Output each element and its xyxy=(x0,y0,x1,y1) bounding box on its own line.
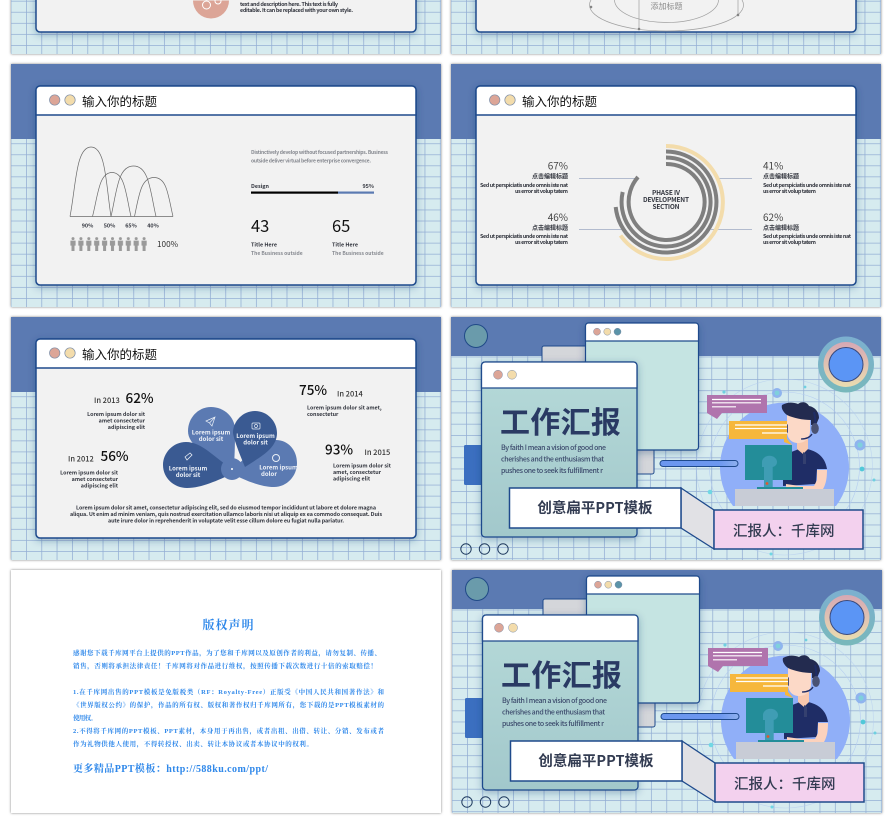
callout: 67% xyxy=(480,158,569,195)
link: 更多精品PPT模板：http://588ku.com/ppt/ xyxy=(73,762,268,775)
callout: 2013: Lorem ipsum dolor sit xyxy=(87,410,146,418)
stat: 65 xyxy=(332,213,384,257)
callout: 2015: 93% xyxy=(325,438,353,458)
callout: 46%: us error sit volup tatem xyxy=(515,238,568,246)
callout: 62%: us error sit volup tatem xyxy=(763,238,816,246)
text block: text and description here. This text is fully xyxy=(240,0,339,8)
cover subtitle: pushes one to seek its fulfillment r xyxy=(501,466,603,476)
callout: 62%: 点击编辑标题 xyxy=(763,223,799,232)
chart centre label: DEVELOPMENT xyxy=(643,194,689,204)
callout: 2013: adipiscing elit xyxy=(108,423,146,431)
callout: 2014: Lorem ipsum dolor sit amet, xyxy=(307,404,382,412)
callout: 2015: adipiscing elit xyxy=(333,474,371,482)
panel: petal diagram slide xyxy=(11,317,441,560)
callout: 2014: consectetur xyxy=(307,410,339,418)
text block xyxy=(251,149,389,164)
text block xyxy=(70,504,382,524)
callout: 2013: In 2013 xyxy=(94,395,120,406)
stat: 43: 43 xyxy=(251,213,269,237)
icon: ring xyxy=(818,336,874,392)
bar xyxy=(661,714,739,720)
callout: 67%: 67% xyxy=(548,158,568,172)
illustration: person at desk xyxy=(696,379,876,556)
heading: 输入你的标题 xyxy=(522,91,598,110)
heading: 输入你的标题 xyxy=(82,344,158,363)
text block: 《世界版权公约》的保护，作品的所有权、版权和著作权归千库网所有，您下载的是PPT模板素材的 xyxy=(73,700,384,710)
cover subtitle: By faith I mean a vision of good one xyxy=(502,696,607,706)
chart: petal diagram: dolor xyxy=(261,469,277,478)
chart centre label: PHASE IV xyxy=(652,187,681,197)
icon: ring xyxy=(819,590,875,646)
chart labels: 65% xyxy=(125,222,137,230)
front window xyxy=(482,615,638,790)
callout: 62%: Sed ut perspiciatis unde omnis iste nat xyxy=(763,232,852,240)
panel: arches chart slide xyxy=(11,64,441,307)
callout: 62%: 62% xyxy=(763,209,783,224)
callout: 67%: Sed ut perspiciatis unde omnis iste nat xyxy=(480,181,569,189)
icon: circle xyxy=(466,578,488,600)
callout: 2012: 56% xyxy=(100,445,129,465)
callout: 2012 xyxy=(60,445,129,490)
cover subtitle: cherishes and the enthusiasm that xyxy=(502,708,605,718)
diagram: ellipses xyxy=(590,0,744,31)
blue tab xyxy=(465,698,485,738)
banner: 创意扁平PPT模板 xyxy=(537,497,653,518)
front window xyxy=(482,362,637,537)
callout: 2013: amet consectetur xyxy=(99,416,146,424)
callout: 41% xyxy=(763,158,852,195)
connector xyxy=(681,488,714,549)
decorative grey cards xyxy=(543,599,655,727)
chart labels: 40% xyxy=(147,222,159,230)
text block xyxy=(240,0,353,14)
text block: 销售，否则将承担法律责任！千库网将对作品进行维权，按照传播下载次数进行十倍的索取赔偿！ xyxy=(73,661,377,671)
back window xyxy=(586,323,698,450)
chart: petal diagram: Lorem ipsum xyxy=(169,464,207,472)
panel: cover slide xyxy=(451,317,881,560)
callout: 46% xyxy=(480,209,569,246)
chart: petal diagram: Lorem ipsum xyxy=(236,431,275,440)
callout: 2013: 62% xyxy=(126,387,154,407)
chart: petal diagram: dolor sit xyxy=(243,438,268,446)
text block: Distinctively develop without focused partnerships. Business xyxy=(251,149,389,156)
presenter box: 汇报人：千库网 xyxy=(733,520,834,541)
callout: 46%: 46% xyxy=(548,209,568,224)
chart labels: 50% xyxy=(104,222,115,230)
banner xyxy=(510,741,682,781)
text block: editable. It can be replaced with your own style. xyxy=(240,6,353,14)
icon: pagination circles xyxy=(461,544,508,554)
connector xyxy=(682,741,715,802)
callout: 41%: 41% xyxy=(763,158,783,172)
chart: petal diagram: Lorem ipsum xyxy=(259,462,298,472)
callout: 2014 xyxy=(299,379,382,418)
text block: 使用权。 xyxy=(73,713,97,722)
heading: 版权声明 xyxy=(202,617,255,632)
callout: 67%: 点击编辑标题 xyxy=(532,172,568,180)
chart: arches xyxy=(70,147,173,216)
progress bar xyxy=(251,182,374,194)
chart: radial rings xyxy=(579,146,752,259)
illustration: person at desk xyxy=(698,632,876,808)
callout: 2014: 75% xyxy=(299,379,327,399)
callout: 67%: us error sit volup tatem xyxy=(515,187,568,195)
text block: 2.不得将千库网的PPT模板、PPT素材，本身用于再出售，或者出租、出借、转让、分销、发布或者 xyxy=(73,726,384,736)
callout: 2015: amet, consectetur xyxy=(333,468,382,476)
cover title: 工作汇报 xyxy=(500,398,621,442)
stat: 65: The Business outside xyxy=(332,250,384,257)
text block: Lorem ipsum dolor sit amet, consectetur adipiscing elit, sed do eiusmod tempor incididunt ut labore et dolore magna xyxy=(76,504,376,512)
callout: 46%: 点击编辑标题 xyxy=(532,223,568,232)
callout: 2012: Lorem ipsum dolor sit xyxy=(60,468,119,476)
cover subtitle: By faith I mean a vision of good one xyxy=(501,443,606,453)
callout: 2015: In 2015 xyxy=(364,447,390,458)
icon: gears circle xyxy=(193,0,229,18)
panel: copyright slide xyxy=(11,570,441,813)
chart centre label: SECTION xyxy=(652,201,680,211)
back window xyxy=(586,576,700,703)
decorative grey cards xyxy=(542,346,654,474)
heading: 输入你的标题 xyxy=(82,91,158,110)
chart: petal diagram: dolor sit xyxy=(176,470,201,479)
blue tab xyxy=(464,445,484,485)
text block: aute irure dolor in reprehenderit in voluptate velit esse cillum dolore eu fugiat nulla pariatur. xyxy=(108,516,344,524)
callout: 41%: us error sit volup tatem xyxy=(763,187,816,195)
stat: 43: The Business outside xyxy=(251,250,303,257)
callout: 2012: amet consectetur xyxy=(72,475,119,483)
label: 添加标题 xyxy=(650,1,682,12)
icon: pagination circles xyxy=(462,797,509,807)
icon: circle xyxy=(464,324,488,348)
chart: petal diagram xyxy=(163,407,298,488)
bar xyxy=(660,460,738,466)
cover subtitle: cherishes and the enthusiasm that xyxy=(501,454,604,464)
callout: 41%: 点击编辑标题 xyxy=(763,172,799,180)
slide: top-right partial xyxy=(451,0,881,54)
text block: 1.在千库网出售的PPT模板是免版税类（RF：Royalty-Free）正版受《中国人民共和国著作法》和 xyxy=(73,687,384,696)
text block xyxy=(73,648,384,749)
label: 100%: 100% xyxy=(157,238,179,250)
slide: top-left partial xyxy=(11,0,441,54)
callout: 2012: In 2012 xyxy=(68,454,94,464)
icon row: people xyxy=(70,237,149,251)
banner: 创意扁平PPT模板 xyxy=(538,750,654,771)
banner xyxy=(510,488,681,528)
progress bar: 95% xyxy=(362,182,374,190)
text block: aliqua. Ut enim ad minim veniam, quis nostrud exercitation ullamco laboris nisi ut aliquip ex ea commodo consequat. Duis xyxy=(70,510,382,518)
stat: 65: 65 xyxy=(332,213,350,237)
chart: petal diagram: dolor sit xyxy=(199,434,224,443)
panel: cover slide repeat xyxy=(452,570,882,813)
callout: 2013 xyxy=(87,387,154,431)
presenter box xyxy=(715,763,864,802)
callout: 2015: Lorem ipsum dolor sit xyxy=(333,462,392,470)
callout: 62% xyxy=(763,209,852,246)
callout: 2014: In 2014 xyxy=(337,388,364,400)
text block: outside deliver virtual before enterprise convergence. xyxy=(251,158,371,164)
callout: 46%: Sed ut perspiciatis unde omnis iste nat xyxy=(480,232,569,240)
cover subtitle xyxy=(501,443,606,476)
text block: 感谢您下载千库网平台上提供的PPT作品，为了您和千库网以及原创作者的利益，请勿复制、传播、 xyxy=(73,648,381,658)
cover subtitle: pushes one to seek its fulfillment r xyxy=(502,719,604,729)
presenter box xyxy=(714,510,863,549)
text block: 作为礼物供他人使用，不得转授权、出卖、转让本协议或者本协议中的权利。 xyxy=(73,739,313,749)
callout: 2012: adipiscing elit xyxy=(81,482,119,490)
chart labels xyxy=(82,222,159,230)
progress bar: Design xyxy=(251,182,270,190)
chart labels: 90% xyxy=(82,222,93,230)
chart centre label xyxy=(643,187,689,211)
stat: 43: Title Here xyxy=(251,240,277,248)
cover subtitle xyxy=(502,696,607,729)
cover title: 工作汇报 xyxy=(501,651,622,695)
panel: ring chart slide xyxy=(451,64,881,307)
presenter box: 汇报人：千库网 xyxy=(734,773,836,794)
stat: 65: Title Here xyxy=(332,240,358,248)
stat: 43 xyxy=(251,213,303,257)
chart: petal diagram: Lorem ipsum xyxy=(192,428,230,436)
callout: 2015 xyxy=(325,438,392,482)
callout: 41%: Sed ut perspiciatis unde omnis iste nat xyxy=(763,181,852,189)
